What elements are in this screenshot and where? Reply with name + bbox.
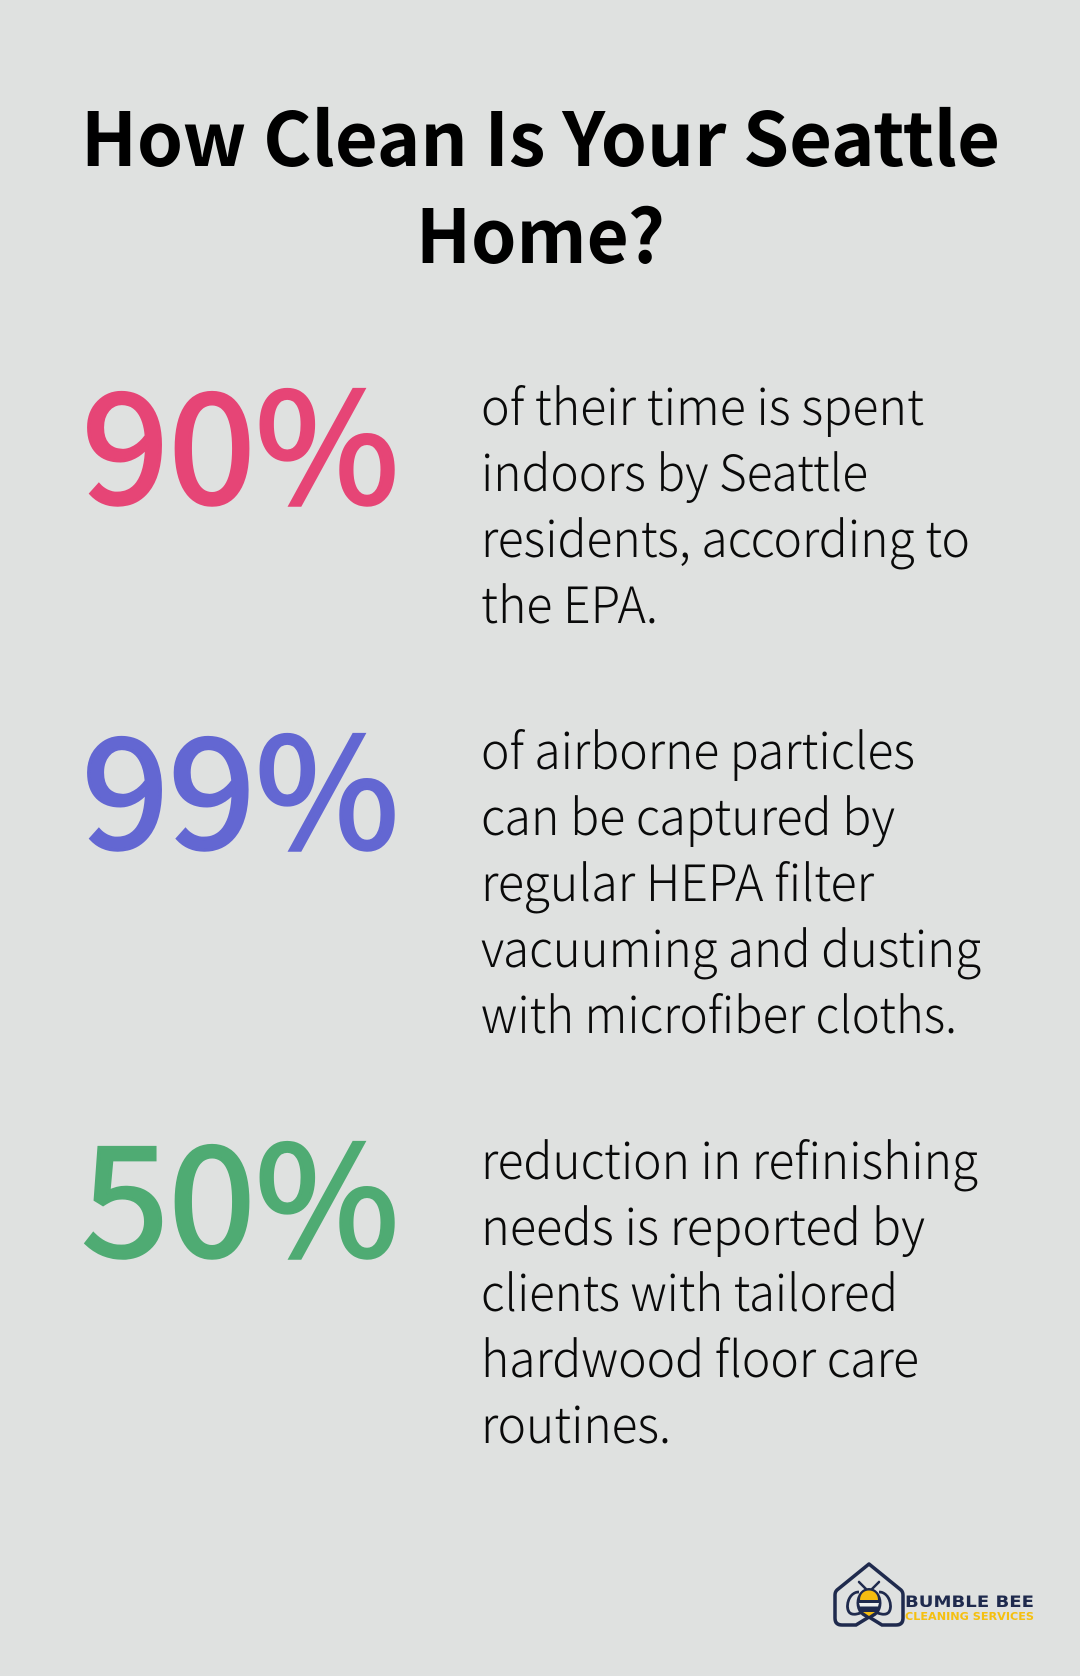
description: 50%: clients with tailored	[481, 1254, 898, 1326]
description: 90%: residents, according to	[481, 500, 970, 572]
panel: stat 99%	[82, 672, 981, 1048]
title	[81, 81, 1000, 285]
title: How Clean Is Your Seattle	[81, 81, 1000, 188]
description: 50%: hardwood floor care	[481, 1320, 919, 1392]
description: 90%	[481, 368, 970, 638]
description: 99%: regular HEPA filter	[481, 844, 875, 916]
description: 99%: of airborne particles	[481, 712, 915, 784]
description: 99%: can be captured by	[481, 778, 895, 850]
description: 90%: indoors by Seattle	[481, 434, 868, 506]
description: 90%: of their time is spent	[481, 368, 924, 440]
logo: Bumble Bee Cleaning Services	[835, 1564, 1034, 1625]
description: 50%	[481, 1122, 978, 1458]
description: 50%: needs is reported by	[481, 1188, 925, 1260]
panel: stat 50%	[82, 1080, 978, 1458]
description: 99%	[481, 712, 981, 1048]
description: 99%: vacuuming and dusting	[481, 910, 981, 982]
icon: house with bee	[835, 1564, 903, 1625]
description: 50%: routines.	[481, 1386, 671, 1458]
stat number: 90%: 90%	[82, 327, 399, 547]
panel: stat 90%	[82, 327, 970, 638]
title: Home?	[416, 178, 665, 285]
description: 99%: with microfiber cloths.	[481, 976, 957, 1048]
logo tagline: CLEANING SERVICES	[905, 1610, 1034, 1623]
logo wordmark: BUMBLE BEE	[905, 1592, 1034, 1611]
description: 50%: reduction in refinishing	[481, 1122, 978, 1194]
description: 90%: the EPA.	[481, 566, 658, 638]
stat number: 50%: 50%	[82, 1080, 399, 1300]
stat number: 99%: 99%	[82, 672, 399, 892]
